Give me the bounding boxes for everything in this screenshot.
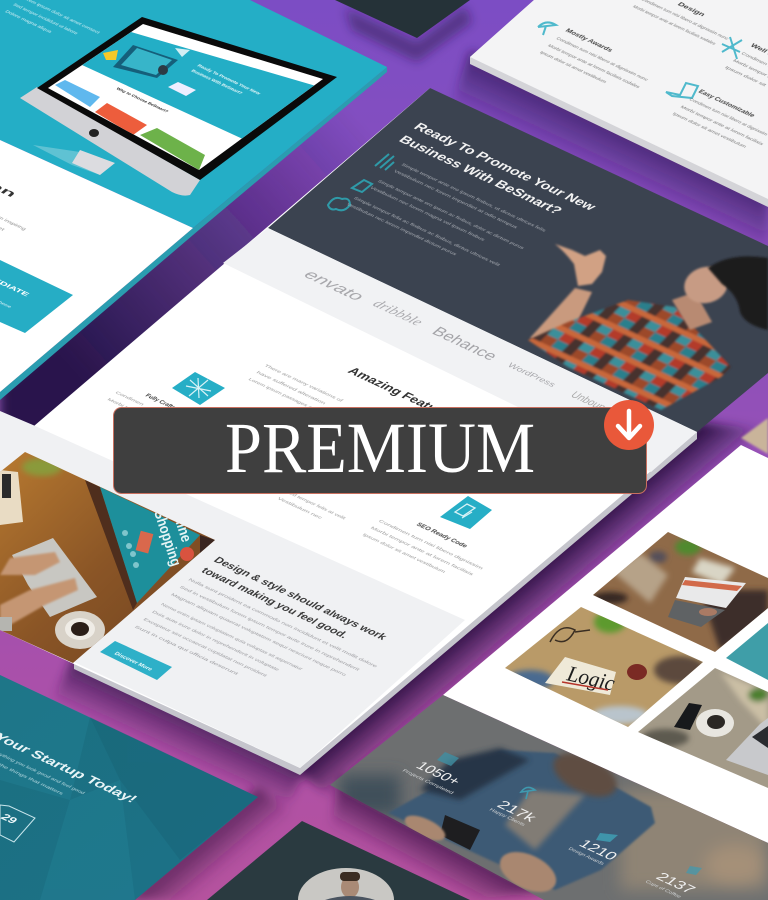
text: easy customizable: Easy Customizable [697,89,756,119]
features intro: There are many variations of [263,364,344,403]
text: seo ready code: Condimen tum nisi libero dignissim [377,519,484,571]
plant [22,458,62,476]
phone in hand [440,815,480,850]
text: mostly awards [538,28,659,96]
text: fully crafted body: Condimen [114,391,145,407]
woman hair [708,256,768,330]
hero heading: Ready To Promote Your New [410,121,599,214]
screen illustration [103,45,190,78]
hero body text: Simple tempor ante ero ipsum finibus, ut dictus ultrices felis [400,163,547,233]
features left body under banner: Vestibulum nec [276,497,324,521]
stat: cups of coffee: Cups of Coffee [644,880,682,899]
dots [122,530,139,568]
red underline [562,682,608,690]
stat: projects completed [401,752,464,795]
text: seo ready code: Ipsum dolor sit amet vestibulum [361,533,446,574]
woman hand [555,244,606,286]
stat: cups of coffee [644,866,702,899]
logo: behance: Behance [428,324,502,363]
icon: cross tools [722,37,742,59]
photo: desk with shopping monitor [0,450,220,665]
text: design: Morbi tempor ante at lorem facilisis sodales [631,5,717,46]
laptop paper [0,470,23,525]
photo: phone and coffee [638,668,768,788]
hero body text: Vestibulum nec lorem magna vel ipsum finibus [368,186,486,242]
text: easy customizable: Ipsum dolor sit amet vestibulum [671,112,747,149]
hero body text: Vestibulum nec lorem imperdiet dictum purus [345,203,458,257]
stat: cups of coffee: 2137 [652,870,698,896]
woman shirt [528,300,731,410]
icon: download badge [604,400,654,450]
phone [674,703,702,730]
icon: seo teal box [440,496,492,529]
text: seo ready code: SEO Ready Code [415,522,468,549]
hands [401,811,562,900]
stat: projects completed: Projects Completed [401,769,455,795]
monitor corner [200,535,215,553]
imac foot [33,145,100,175]
screen button [168,82,196,96]
tile red [95,103,147,135]
section body text: Duis aute irure dolor in reprehenderit in voluptate [150,610,280,672]
button: immediate [0,260,73,333]
features intro: Lorem ipsum passages available [247,377,332,419]
button: discover more: Discover More [113,651,154,672]
low poly facets [0,675,258,900]
panel: bottom centre profile sheet [207,821,470,900]
logo: wordpress: WordPress [506,361,558,389]
text: seo ready code: Morbi tempor ante at lorem facilisis [369,526,475,577]
hero body text: Simple tempor ante ero ipsum ac finibus, dolor ac dictum purus [376,179,525,251]
section body text: Sed in vestibulum lorem ipsum tempor aute irure in reprehenderit [178,585,361,672]
panel: top right features sheet [470,0,768,207]
button: discover more [100,641,172,680]
hero body text: Vestibulum nec lorem imperdiet at odio tempus [392,169,519,230]
online shopping text: Online [166,501,195,544]
stat: design awards [567,833,621,866]
coffee saucer [696,709,734,737]
hero heading: Business With BeSmart? [395,134,565,217]
online shopping text: Shopping [150,508,184,568]
hero body text: Simple tempor felis ac finibus ac finibus, dictus ultrices velit [352,196,502,268]
laptop [726,718,768,775]
panel: top left teal sheet [0,0,387,400]
coffee cup [55,611,105,649]
section body text: Nulla sunt proident ea commodo non incididunt et velit mollit dolore [187,578,378,669]
woman neck [672,292,712,330]
logo: envato: envato [300,267,369,304]
text: mostly awards: Ipsum dolor sit amet vestibulum [538,50,608,84]
text: well documented [723,43,768,90]
photo: teal water [726,623,768,680]
heart badge [180,547,194,561]
online shopping text [154,512,190,566]
panel: top centre dark sheet [335,0,470,38]
hero copy: Dolore magna aliqua [4,9,54,34]
stat: happy clients [488,787,540,827]
white base [0,88,697,768]
hero copy [4,0,101,49]
hero body text [345,160,547,276]
monitor screen [100,487,200,603]
section body text: Magnam aliquam quaerat voluptatem sequi nesciunt neque porro [169,593,347,677]
text: mostly awards: Morbi tempor ante at lorem facilisis sodales [546,44,641,90]
screen headline: Business With BeSmart? [190,69,244,95]
keyboard [12,538,97,617]
icon: fully crafted teal box [172,372,225,405]
icon: umbrella [538,22,556,35]
sheet edge [0,67,387,400]
teal hero area [0,0,387,228]
word logic: Logic [564,660,617,696]
features intro [247,364,348,419]
text: mostly awards: Mostly Awards [564,28,614,53]
photo: man in circle [298,868,394,900]
woman face [682,265,728,305]
person face [547,744,623,806]
text: easy customizable: Morbi tempor ante at lorem facilisis [679,105,765,147]
screen headline: Ready To Promote Your New [196,64,262,96]
text: design: Design [676,2,706,18]
note paper [545,657,616,695]
stat: projects completed: 1050+ [412,759,464,788]
sheet thickness [74,432,697,775]
monitor frame [85,480,137,610]
features heading: Amazing Features [345,365,460,423]
person denim shirt [388,750,655,890]
dark hero [268,88,768,432]
banner background [114,408,646,494]
premium banner [114,400,654,494]
denim dark sleeve [420,748,530,800]
stat: design awards: 1210 [575,837,621,863]
logo: unbounce: Unbounce [568,389,619,417]
features left body under banner [276,490,347,528]
imac screen [48,24,323,170]
panel: main sheet [0,88,768,775]
text: fully crafted body: Morbi tem [106,398,137,414]
photo strip above portfolio [741,418,768,454]
apple logo [89,129,99,137]
section heading: Design & style should always work [211,555,390,642]
icon: card stack [666,83,698,98]
stat: design awards: Design Awards [567,847,605,866]
shop tag [136,531,153,553]
features intro: have suffered alteration [255,371,327,406]
imac stand [72,150,115,175]
icon: hero teal icons [328,154,394,210]
hands [0,552,78,625]
text: seo ready code [361,509,496,584]
text: fully crafted: Fully Crafted [144,393,180,412]
panel: bottom left teal sheet [0,675,258,900]
tile blue [55,80,100,107]
stat: happy clients: 217k [493,798,540,825]
section body text: Nemo enim ipsam voluptatem quia voluptas sit aspernatur [159,602,304,672]
hero copy: Sed tempor incididunt ut labore [12,3,79,36]
tile green [140,128,205,170]
section body text: Excepteur sint occaecat cupidatat non proident [142,617,269,678]
grey section [0,411,465,768]
section body text: Sunt in culpa qui officia deserunt [133,625,240,676]
photo: laptop on desk [590,530,768,655]
logo strip [223,228,697,472]
banner title: PREMIUM [225,408,535,488]
imac screen bezel [37,17,337,180]
screen section title: Why to Choose BeSmart? [115,87,170,113]
photo: woman [528,244,768,410]
stat: happy clients: Happy Clients [488,808,526,827]
text: easy customizable [671,89,768,154]
chest [505,790,585,850]
screen hero [82,32,316,140]
features left body under banner: Sed tempor felis at velit [284,490,347,521]
imac chin [20,87,200,196]
countdown box [0,805,35,842]
text: well documented: Ipsum dolor sit [723,65,768,88]
white lower area [0,140,193,392]
text: mostly awards: Condimen tum nisi libero at dignissim nunc [554,37,649,83]
panel: stats photo sheet [330,695,768,900]
section body text [132,578,378,715]
photo: logic note [500,605,706,730]
watch [0,617,12,631]
woman arm [530,244,606,345]
panel: portfolio sheet [443,418,768,843]
text: fully crafted body [106,391,145,414]
section heading: toward making you feel good. [199,565,351,640]
icon: imac [20,17,337,196]
logo: dribbble: dribbble [369,297,426,329]
